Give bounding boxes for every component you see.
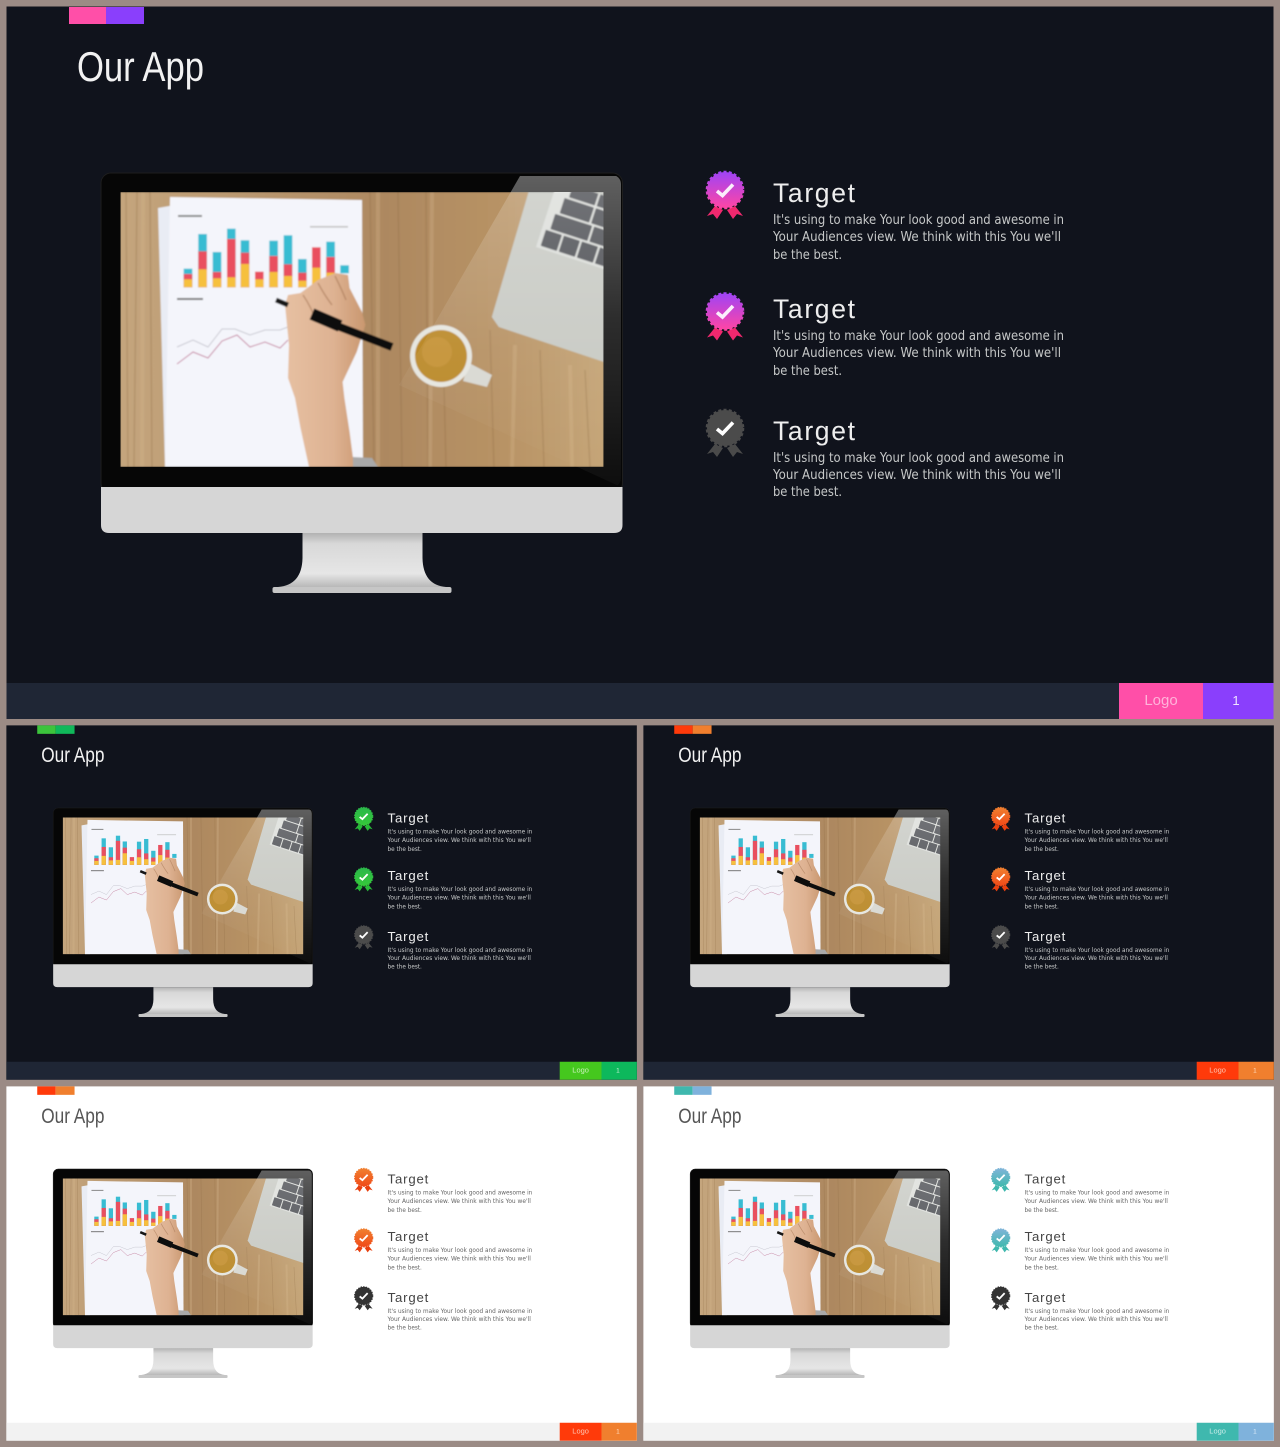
item text: Your Audiences view. We think with this You we'll (772, 230, 1061, 245)
item heading: Target (1025, 1290, 1066, 1305)
footer bar (6, 1423, 637, 1441)
item heading: Target (1025, 1229, 1066, 1244)
item text: Your Audiences view. We think with this You we'll (387, 1255, 531, 1263)
item text (1024, 946, 1169, 971)
item 3 (355, 926, 532, 971)
wood desk (120, 192, 604, 467)
item text (387, 827, 532, 853)
icon: orange ribbon badge (992, 868, 1010, 891)
item text: It's using to make Your look good and awesome in (1025, 1246, 1169, 1254)
item text: It's using to make Your look good and awesome in (1025, 1188, 1169, 1196)
item heading: Target (388, 868, 429, 883)
stacked bar chart on paper (177, 215, 349, 300)
screen glare (399, 176, 621, 487)
item text: Your Audiences view. We think with this You we'll (1024, 954, 1168, 962)
wristband (352, 457, 378, 467)
item text (387, 885, 532, 910)
icon: teal ribbon badge (992, 1229, 1010, 1252)
item text: be the best. (388, 1206, 422, 1214)
title: Our App (41, 1105, 104, 1128)
item text (1024, 885, 1169, 910)
item text: Your Audiences view. We think with this You we'll (387, 1197, 531, 1205)
icon: purple ribbon badge (707, 172, 743, 219)
item heading: Target (388, 1229, 429, 1244)
monitor mockup (53, 808, 323, 1017)
panel: light slide with teal and blue accents (643, 1086, 1274, 1441)
item heading: Target (773, 294, 856, 324)
panel: dark slide with orange accents (643, 725, 1274, 1080)
footer logo and page number: Logo (1209, 1066, 1226, 1075)
coffee cup (410, 325, 492, 387)
item 2 (992, 1229, 1169, 1272)
item heading: Target (1025, 1171, 1066, 1186)
item heading: Target (773, 416, 856, 446)
item text (387, 1246, 532, 1272)
item text: be the best. (773, 485, 842, 500)
item text (772, 451, 1064, 500)
item text (387, 946, 532, 971)
icon: grey ribbon badge (355, 926, 373, 949)
slide background (643, 725, 1274, 1080)
item 1 (992, 1168, 1169, 1214)
footer logo and page number (560, 1062, 637, 1080)
accent tab (37, 725, 75, 734)
item text: Your Audiences view. We think with this You we'll (1024, 1255, 1168, 1263)
title: Our App (678, 744, 741, 767)
item text: be the best. (1025, 1264, 1059, 1272)
item heading: Target (388, 810, 429, 825)
bezel glare (399, 176, 621, 487)
slide background (6, 1086, 637, 1441)
title: Our App (41, 744, 104, 767)
footer logo and page number: Logo (1144, 692, 1178, 709)
icon: grey ribbon badge (992, 926, 1010, 949)
item text: be the best. (1025, 903, 1059, 911)
item text (1024, 827, 1169, 853)
footer logo and page number: 1 (616, 1068, 620, 1075)
icon: dark ribbon badge (992, 1287, 1010, 1310)
item text (772, 329, 1064, 379)
item text: It's using to make Your look good and awesome in (388, 1188, 532, 1196)
item text: be the best. (388, 1264, 422, 1272)
footer logo and page number: Logo (1209, 1427, 1226, 1436)
monitor mockup (690, 1169, 960, 1378)
item text (1024, 1246, 1169, 1272)
footer bar (6, 683, 1274, 719)
item 2 (992, 868, 1169, 910)
panel: light slide with orange accents (6, 1086, 637, 1441)
accent tab (37, 1086, 75, 1095)
slide background (643, 1086, 1274, 1441)
footer bar (643, 1423, 1274, 1441)
item text (1024, 1307, 1169, 1332)
footer logo and page number: 1 (1253, 1429, 1257, 1436)
footer logo and page number (1197, 1423, 1274, 1441)
item text: It's using to make Your look good and awesome in (388, 827, 532, 835)
footer logo and page number (1197, 1062, 1274, 1080)
item 2 (355, 1229, 532, 1272)
title: Our App (77, 43, 204, 90)
footer bar (643, 1062, 1274, 1080)
paper sheets (158, 197, 363, 467)
item 1 (355, 807, 532, 853)
item text: It's using to make Your look good and awesome in (1025, 1307, 1169, 1315)
title: Our App (678, 1105, 741, 1128)
item 3 (992, 1287, 1169, 1332)
slide background (6, 6, 1274, 719)
item text: It's using to make Your look good and awesome in (773, 451, 1064, 466)
footer logo and page number: 1 (1253, 1068, 1257, 1075)
item text: It's using to make Your look good and awesome in (773, 329, 1064, 344)
icon: dark ribbon badge (355, 1287, 373, 1310)
icon: orange ribbon badge (992, 807, 1010, 831)
accent tab (674, 725, 712, 734)
item 3 (355, 1287, 532, 1332)
icon: orange ribbon badge (355, 1168, 373, 1192)
item text: It's using to make Your look good and awesome in (388, 1246, 532, 1254)
item text: It's using to make Your look good and awesome in (773, 213, 1064, 228)
item text: be the best. (1025, 1206, 1059, 1214)
item heading: Target (1025, 868, 1066, 883)
item text: be the best. (1025, 1324, 1059, 1332)
item text: It's using to make Your look good and awesome in (1025, 885, 1169, 893)
accent tab (69, 7, 144, 24)
item text: be the best. (773, 364, 842, 379)
panel: dark slide with green accents (6, 725, 637, 1080)
item text: be the best. (388, 903, 422, 911)
footer logo and page number: Logo (572, 1066, 589, 1075)
item text: It's using to make Your look good and awesome in (1025, 946, 1169, 954)
item text: Your Audiences view. We think with this You we'll (1024, 836, 1168, 844)
item text (1024, 1188, 1169, 1214)
photo: desk with charts, hand, coffee and laptop (120, 180, 643, 467)
item text (387, 1307, 532, 1332)
monitor bezel (101, 173, 622, 493)
monitor mockup (690, 808, 960, 1017)
icon: grey ribbon badge (707, 410, 743, 457)
hand holding pen (276, 273, 392, 467)
footer logo and page number (560, 1423, 637, 1441)
item text: It's using to make Your look good and awesome in (388, 885, 532, 893)
item text: It's using to make Your look good and awesome in (388, 946, 532, 954)
item text: be the best. (773, 248, 842, 263)
item 1 (707, 172, 1064, 263)
item text: Your Audiences view. We think with this You we'll (1024, 894, 1168, 902)
item text (387, 1188, 532, 1214)
item text: be the best. (1025, 845, 1059, 853)
footer logo and page number: Logo (572, 1427, 589, 1436)
icon: green ribbon badge (355, 807, 373, 831)
item heading: Target (388, 1171, 429, 1186)
icon: orange ribbon badge (355, 1229, 373, 1252)
item text: Your Audiences view. We think with this You we'll (772, 468, 1061, 483)
monitor mockup (101, 173, 643, 593)
item 2 (355, 868, 532, 910)
item heading: Target (388, 929, 429, 944)
item text: Your Audiences view. We think with this You we'll (387, 894, 531, 902)
item 3 (992, 926, 1169, 971)
item text: It's using to make Your look good and awesome in (388, 1307, 532, 1315)
item text: be the best. (388, 1324, 422, 1332)
laptop (492, 180, 643, 362)
icon: purple ribbon badge (707, 294, 743, 340)
item text: Your Audiences view. We think with this You we'll (387, 836, 531, 844)
item text: It's using to make Your look good and awesome in (1025, 827, 1169, 835)
footer logo and page number: 1 (1232, 693, 1240, 708)
item heading: Target (1025, 810, 1066, 825)
panel: main slide, dark with pink and purple accents (6, 6, 1274, 719)
item 3 (707, 410, 1064, 500)
item text: be the best. (388, 963, 422, 971)
item text (772, 213, 1064, 263)
icon: teal ribbon badge (992, 1168, 1010, 1192)
item text: Your Audiences view. We think with this You we'll (387, 1315, 531, 1323)
monitor chin (101, 487, 622, 533)
item text: Your Audiences view. We think with this You we'll (1024, 1197, 1168, 1205)
icon: green ribbon badge (355, 868, 373, 891)
item heading: Target (1025, 929, 1066, 944)
monitor mockup (53, 1169, 323, 1378)
item text: be the best. (1025, 963, 1059, 971)
footer logo and page number: 1 (616, 1429, 620, 1436)
item text: be the best. (388, 845, 422, 853)
item 1 (355, 1168, 532, 1214)
monitor stand (272, 533, 452, 593)
footer logo and page number (1119, 683, 1274, 719)
item heading: Target (388, 1290, 429, 1305)
item text: Your Audiences view. We think with this You we'll (772, 346, 1061, 361)
footer bar (6, 1062, 637, 1080)
item text: Your Audiences view. We think with this You we'll (1024, 1315, 1168, 1323)
item heading: Target (773, 178, 856, 208)
line chart on paper (177, 327, 288, 364)
item 1 (992, 807, 1169, 853)
accent tab (674, 1086, 712, 1095)
item text: Your Audiences view. We think with this You we'll (387, 954, 531, 962)
slide background (6, 725, 637, 1080)
item 2 (707, 294, 1064, 379)
